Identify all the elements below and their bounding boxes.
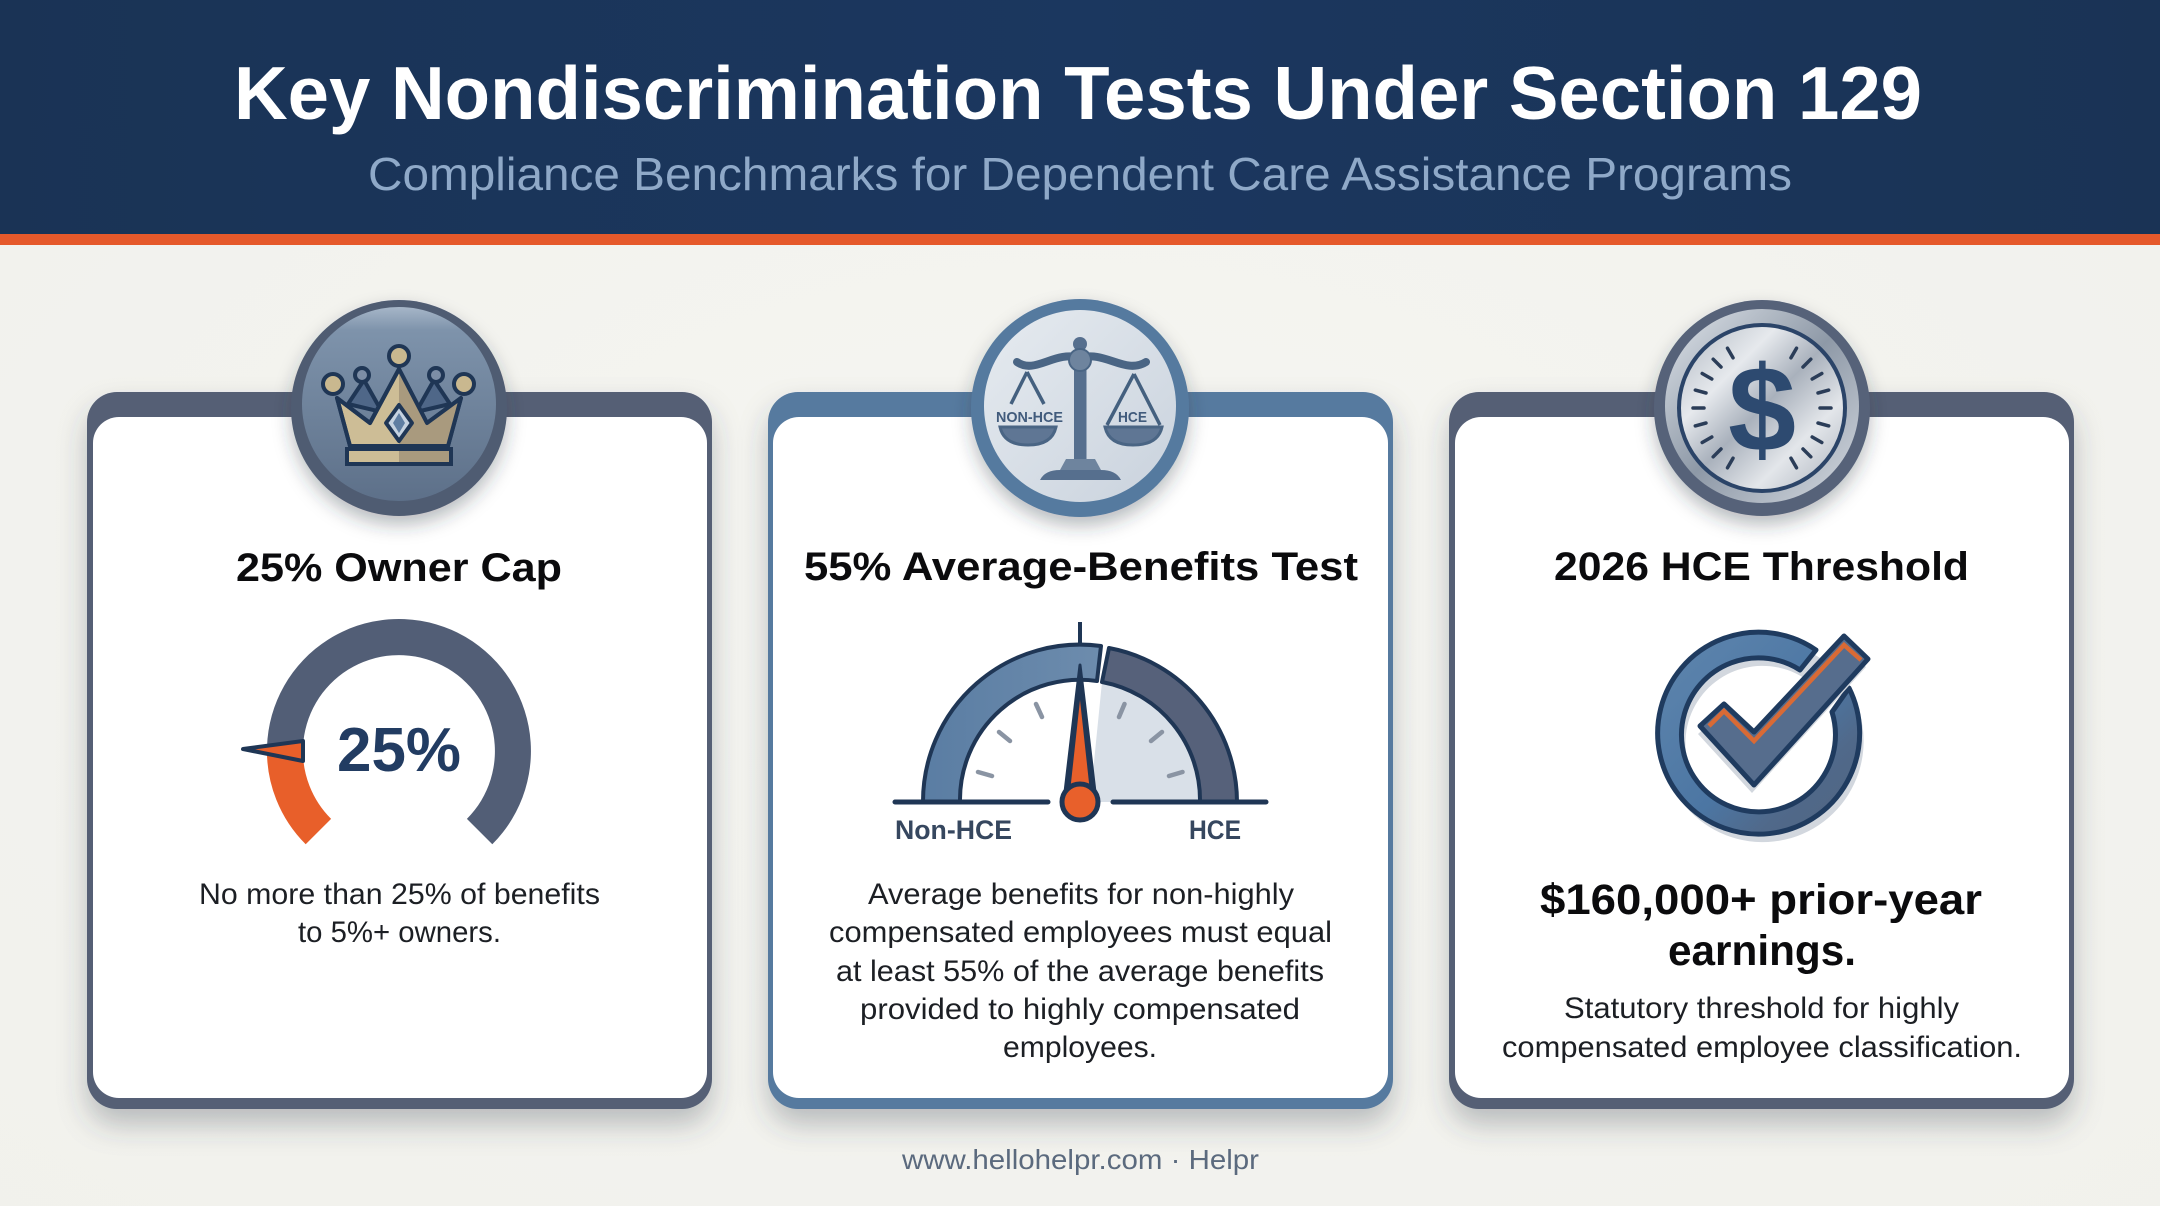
text: average-benefits description: at least 55% of the average benefits bbox=[836, 955, 1324, 988]
text: owner cap description bbox=[199, 878, 600, 949]
panel: 55% average-benefits test bbox=[768, 299, 1393, 1109]
heading: 55% average-benefits test: 55% Average-Benefits Test bbox=[804, 545, 1358, 589]
label: non-hce: Non-HCE bbox=[895, 815, 1012, 845]
text: average-benefits description: provided to highly compensated bbox=[860, 993, 1300, 1026]
text: average-benefits description bbox=[829, 878, 1332, 1064]
callout: $160,000+ prior-year earnings bbox=[1540, 876, 1982, 975]
text: threshold description bbox=[1502, 992, 2022, 1064]
text: average-benefits description: Average benefits for non-highly bbox=[868, 878, 1294, 911]
label: hce: HCE bbox=[1189, 815, 1241, 845]
chart: 25% ring gauge: 25% bbox=[337, 716, 461, 785]
panel: 2026 hce threshold bbox=[1449, 300, 2074, 1109]
heading: 2026 hce threshold: 2026 HCE Threshold bbox=[1554, 545, 1969, 589]
header banner bbox=[0, 0, 2160, 245]
panel: 25% owner cap bbox=[87, 300, 712, 1109]
icon: dollar medallion bbox=[1654, 300, 1870, 516]
heading: 25% owner cap: 25% Owner Cap bbox=[236, 546, 562, 590]
footer credit: www.hellohelpr.com · Helpr bbox=[901, 1144, 1259, 1175]
icon: scales medallion: HCE bbox=[1118, 409, 1147, 426]
icon: scales medallion: NON-HCE bbox=[996, 409, 1063, 426]
chart: split gauge bbox=[895, 622, 1266, 845]
chart: 25% ring gauge bbox=[243, 619, 531, 844]
icon: crown medallion bbox=[291, 300, 507, 516]
text: average-benefits description: compensated employees must equal bbox=[829, 916, 1332, 949]
text: threshold description: compensated employee classification. bbox=[1502, 1031, 2022, 1064]
subtitle: Compliance Benchmarks for Dependent Care Assistance Programs bbox=[368, 148, 1792, 200]
text: owner cap description: No more than 25% of benefits bbox=[199, 878, 600, 911]
text: threshold description: Statutory threshold for highly bbox=[1564, 992, 1959, 1025]
icon: scales medallion bbox=[971, 299, 1189, 517]
callout: $160,000+ prior-year earnings: $160,000+ prior-year bbox=[1540, 876, 1982, 924]
text: average-benefits description: employees. bbox=[1003, 1031, 1157, 1064]
title: Key Nondiscrimination Tests Under Section 129 bbox=[234, 51, 1922, 135]
icon: check mark ring bbox=[1658, 632, 1868, 842]
callout: $160,000+ prior-year earnings: earnings. bbox=[1668, 927, 1856, 975]
text: owner cap description: to 5%+ owners. bbox=[298, 916, 501, 949]
icon: dollar medallion: $ bbox=[1728, 341, 1796, 477]
